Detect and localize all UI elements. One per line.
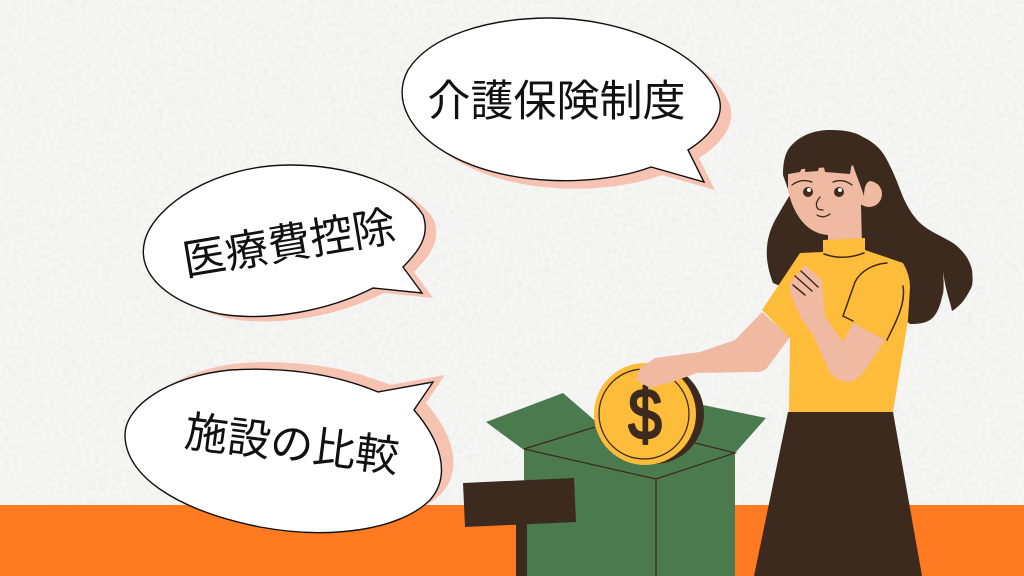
speech bubble: 介護保険制度: 介護保険制度: [428, 78, 686, 126]
skirt: [754, 412, 922, 576]
left arm reaching to coin: [636, 312, 790, 388]
gold dollar coin: $: [628, 374, 662, 454]
right arm and hand: [790, 265, 885, 382]
gold dollar coin: [594, 363, 704, 465]
speech bubble: 施設の比較: [125, 362, 453, 533]
speech bubble: 施設の比較: 施設の比較: [182, 408, 401, 482]
shirt and finger lines: [793, 253, 904, 340]
woman character: [636, 130, 973, 412]
cardboard box: [486, 393, 766, 576]
eyes: [803, 187, 844, 197]
box right flap: [690, 402, 766, 453]
orange floor band: [0, 505, 1024, 576]
yellow shirt: [762, 238, 910, 412]
bangs: [783, 132, 875, 196]
box body: [524, 427, 735, 576]
speech bubble: 医療費控除: 医療費控除: [179, 203, 399, 286]
speech bubble: 介護保険制度: [402, 18, 731, 190]
hair: [767, 130, 973, 324]
box left flap: [486, 393, 600, 450]
neck and face: [788, 165, 862, 245]
speech bubble: 医療費控除: [143, 165, 436, 321]
ear: [856, 181, 882, 207]
wooden sign: [463, 478, 576, 576]
brows, nose and smile: [792, 181, 852, 217]
